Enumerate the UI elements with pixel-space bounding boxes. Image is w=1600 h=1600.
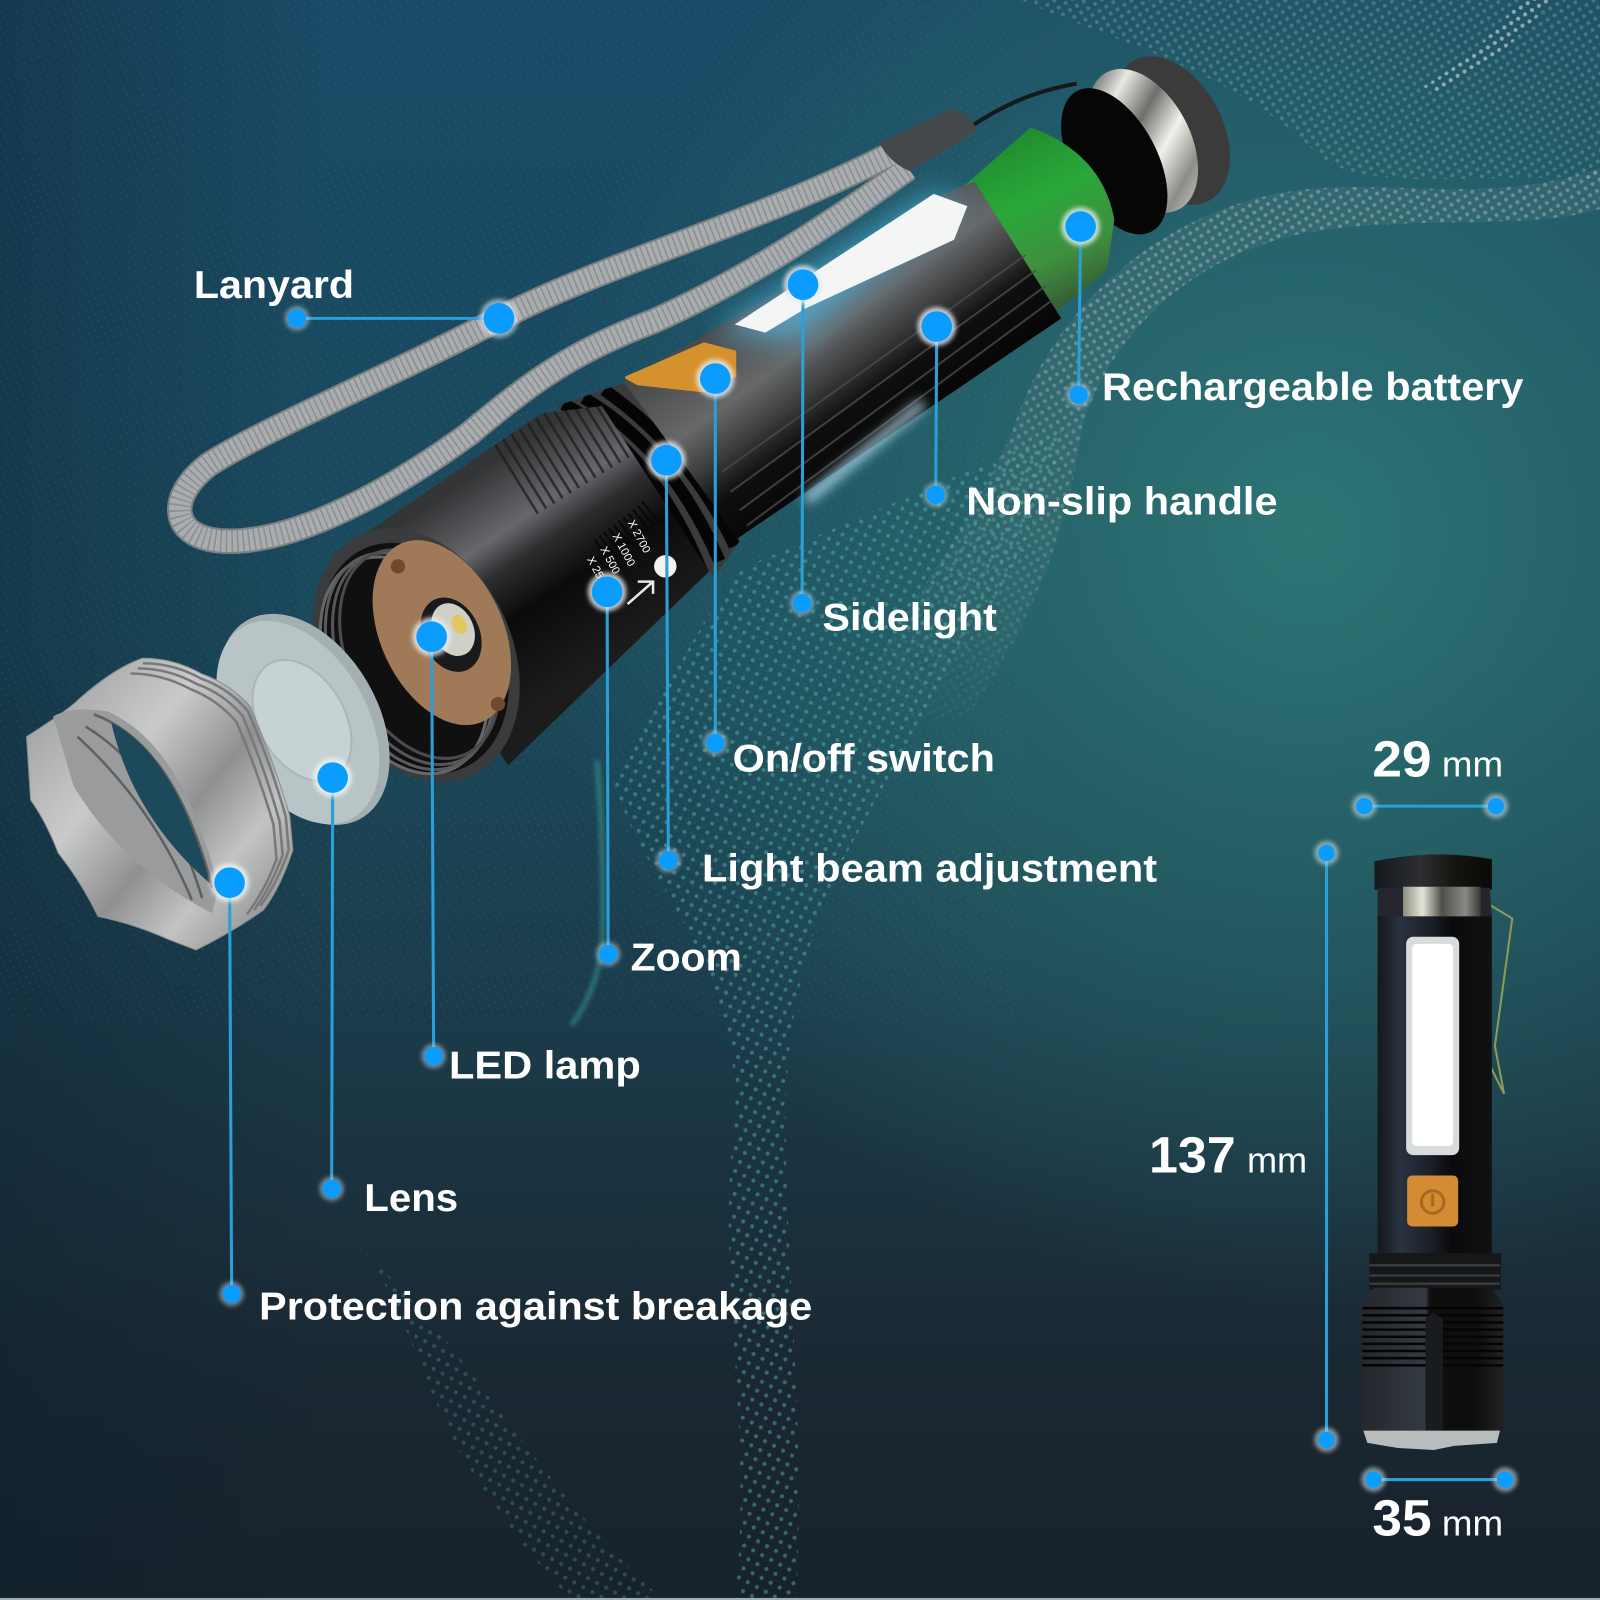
callout: lanyard [194,264,518,338]
front bezel with threads [273,494,559,816]
dimension: 35 mm: 35 [1372,1490,1432,1547]
head: X 250 [584,555,608,586]
dimension: 29 mm: 29 [1372,731,1432,788]
callout: sidelight: Sidelight [822,597,997,640]
cap [1374,855,1492,890]
end cap [1039,36,1254,252]
clip wire [1482,900,1512,1094]
dimension: 29 mm: mm [1442,745,1503,785]
side light window [1406,937,1459,1155]
callout: LED lamp: LED lamp [449,1045,641,1088]
power button [1407,1176,1458,1227]
protective ring [27,658,293,950]
callout: LED lamp [412,617,641,1088]
small flashlight [1361,855,1512,1450]
LED lamp [409,587,493,682]
lanyard [180,84,1077,541]
lens [183,584,425,855]
callout: light beam adjustment [647,441,1157,891]
head: X 1000 [610,531,637,569]
callout: light beam adjustment: Light beam adjustment [702,848,1157,891]
callout: lens [313,758,458,1220]
callout: non-slip handle: Non-slip handle [966,480,1278,523]
main flashlight [273,36,1254,816]
head [359,406,709,765]
callout: zoom: Zoom [631,936,742,979]
copper reflector [345,518,539,747]
callout: protection against breakage: Protection against breakage [259,1285,812,1328]
callout: zoom [588,572,742,979]
bezel [1363,1431,1500,1450]
callout: on/off switch [696,359,995,780]
sidelight [714,194,967,342]
dimension: 35 mm [1361,1467,1517,1547]
callout: protection against breakage [210,863,812,1328]
body [617,182,1061,546]
callout: rechargeable battery: Rechargeable battery [1102,366,1524,409]
head: X 500 [597,545,622,576]
callout: rechargeable battery [1061,207,1524,409]
collar [1369,1253,1501,1290]
battery [964,128,1114,311]
dimension: 29 mm [1352,731,1508,818]
glow streak [806,403,923,500]
callout: lens: Lens [364,1177,458,1220]
dimension: 137 mm: 137 [1149,1126,1236,1183]
callout: on/off switch: On/off switch [733,737,995,780]
chrome band [1403,887,1481,916]
callout: lanyard: Lanyard [194,264,354,307]
dimension: 137 mm: mm [1247,1140,1307,1180]
dimension: 137 mm [1149,841,1339,1452]
neck rings [556,383,740,577]
small body [1378,913,1492,1255]
dimension: 35 mm: mm [1442,1504,1503,1544]
head: X 2700 [625,518,652,555]
callout: non-slip handle [917,307,1278,523]
small head [1361,1288,1504,1437]
callout: sidelight [784,265,997,640]
switch [627,344,735,391]
